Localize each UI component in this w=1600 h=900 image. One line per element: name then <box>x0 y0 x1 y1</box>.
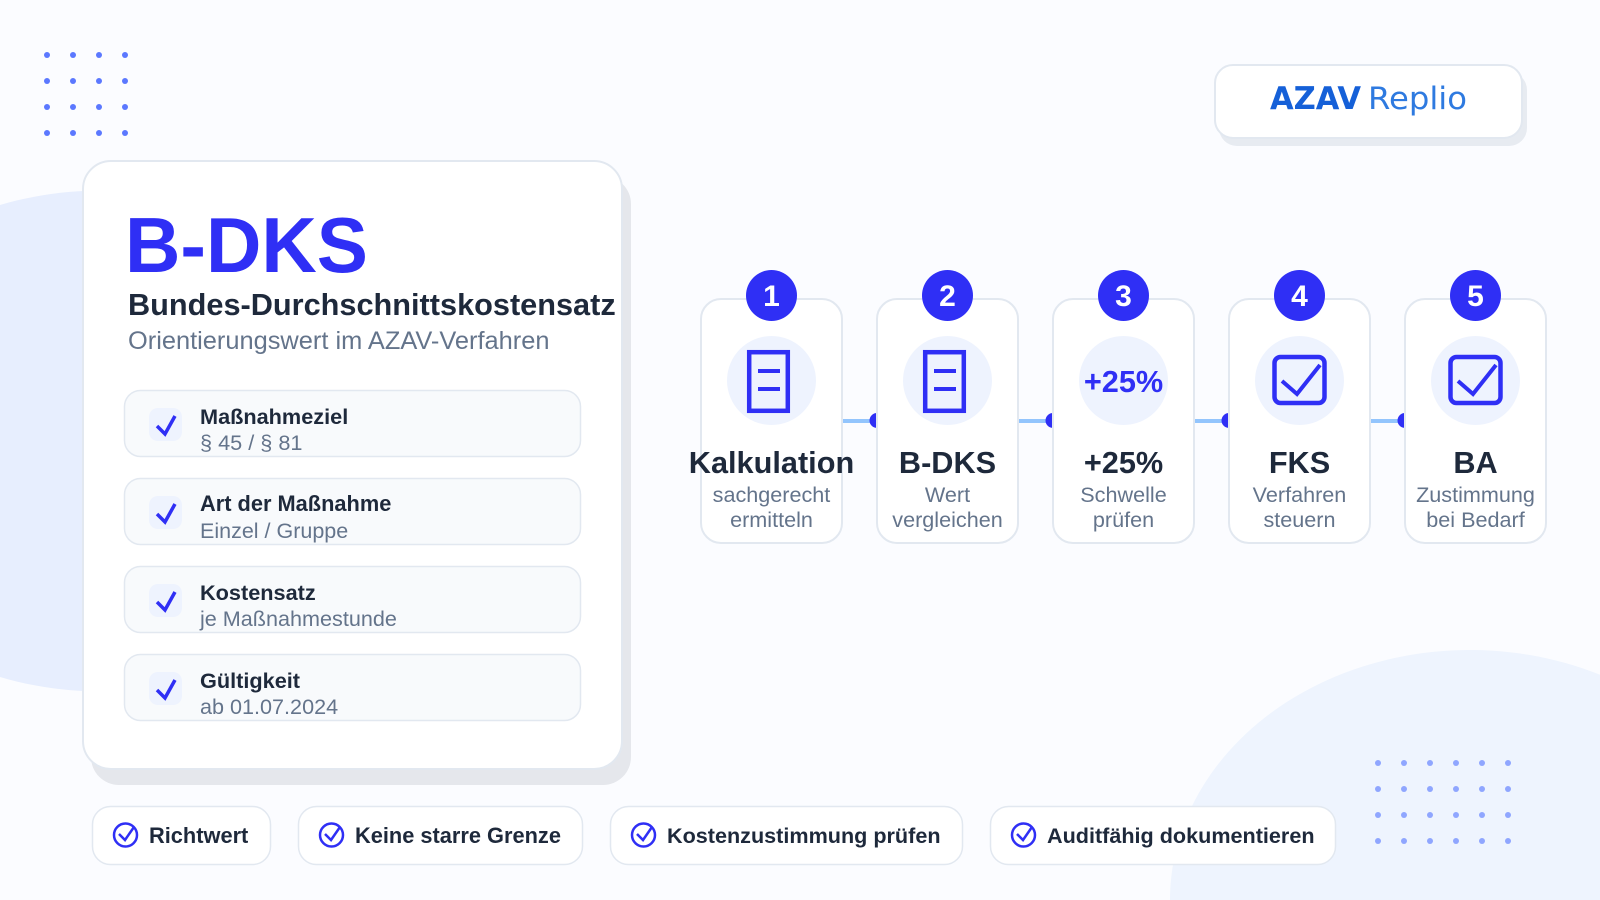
row: Kostensatz <box>124 566 580 632</box>
pill: Keine starre Grenze: Keine starre Grenze <box>355 823 561 848</box>
logo wordmark: Replio <box>1368 81 1467 117</box>
step 5: BA: BA <box>1453 445 1498 480</box>
number badge 4 <box>1274 270 1325 321</box>
row: Gültigkeit <box>124 654 580 720</box>
row: Art der Maßnahme: Art der Maßnahme <box>200 491 391 516</box>
tagline: Orientierungswert im AZAV-Verfahren <box>128 327 549 355</box>
step 5: BA <box>1405 270 1546 543</box>
icon: checkbox <box>1255 336 1344 425</box>
title: B-DKS <box>125 201 368 289</box>
connector: step 1 to 2 <box>842 413 884 428</box>
row: Maßnahmeziel: Maßnahmeziel <box>200 404 348 429</box>
pill: Kostenzustimmung prüfen <box>610 806 962 864</box>
row: Art der Maßnahme <box>124 478 580 544</box>
logo wordmark: AZAV <box>1270 81 1361 117</box>
step 3: +25% <box>1053 270 1194 543</box>
step 1: Kalkulation: ermitteln <box>730 507 813 532</box>
step 1: Kalkulation: sachgerecht <box>713 482 830 507</box>
step 1: Kalkulation <box>689 270 854 543</box>
step 3: +25%: Schwelle <box>1080 482 1167 507</box>
logo wordmark <box>1270 81 1467 117</box>
step 5: BA: Zustimmung <box>1416 482 1535 507</box>
number badge 3: 3 <box>1115 280 1132 313</box>
connector: step 4 to 5 <box>1370 413 1412 428</box>
icon: percent: +25% <box>1084 364 1163 399</box>
step 2: B-DKS: B-DKS <box>899 445 996 480</box>
step 4: FKS: steuern <box>1263 507 1336 532</box>
pill: Auditfähig dokumentieren <box>990 806 1336 864</box>
row: Kostensatz: Kostensatz <box>200 580 316 605</box>
step 4: FKS: Verfahren <box>1253 482 1346 507</box>
number badge 2: 2 <box>939 280 956 313</box>
step 2: B-DKS: Wert <box>925 482 970 507</box>
icon: document <box>727 336 816 425</box>
pill: Keine starre Grenze <box>298 806 582 864</box>
step 4: FKS: FKS <box>1269 445 1330 480</box>
step 5: BA: bei Bedarf <box>1426 507 1526 532</box>
number badge 4: 4 <box>1291 280 1308 313</box>
subtitle: Bundes-Durchschnittskostensatz <box>128 287 616 322</box>
number badge 1: 1 <box>763 280 780 313</box>
dot grid: top left <box>44 52 128 136</box>
step 4: FKS <box>1229 270 1370 543</box>
pill: Richtwert: Richtwert <box>149 823 248 848</box>
row: Gültigkeit: Gültigkeit <box>200 668 300 693</box>
row: Gültigkeit: ab 01.07.2024 <box>200 694 338 719</box>
number badge 3 <box>1098 270 1149 321</box>
number badge 5: 5 <box>1467 280 1484 313</box>
step 2: B-DKS <box>877 270 1018 543</box>
number badge 1 <box>746 270 797 321</box>
icon: checkbox <box>1431 336 1520 425</box>
pill: Auditfähig dokumentieren: Auditfähig dokumentieren <box>1047 823 1315 848</box>
dot grid: bottom right <box>1375 760 1511 844</box>
number badge 5 <box>1450 270 1501 321</box>
step 3: +25%: +25% <box>1084 445 1163 480</box>
row: Maßnahmeziel: § 45 / § 81 <box>200 430 302 455</box>
pill: Richtwert <box>92 806 270 864</box>
icon: document <box>903 336 992 425</box>
step 2: B-DKS: vergleichen <box>892 507 1003 532</box>
row: Art der Maßnahme: Einzel / Gruppe <box>200 519 348 543</box>
icon: percent <box>1079 336 1168 425</box>
row: Kostensatz: je Maßnahmestunde <box>199 606 397 631</box>
pill: Kostenzustimmung prüfen: Kostenzustimmung prüfen <box>667 823 941 848</box>
background blob: left <box>0 191 400 691</box>
step 1: Kalkulation: Kalkulation <box>689 445 854 480</box>
connector: step 2 to 3 <box>1018 413 1060 428</box>
logo badge <box>1215 65 1527 146</box>
row: Maßnahmeziel <box>124 390 580 456</box>
step 3: +25%: prüfen <box>1093 507 1154 532</box>
background blob: bottom right <box>1170 650 1600 900</box>
connector: step 3 to 4 <box>1194 413 1236 428</box>
panel: B-DKS definition card <box>83 161 631 785</box>
number badge 2 <box>922 270 973 321</box>
